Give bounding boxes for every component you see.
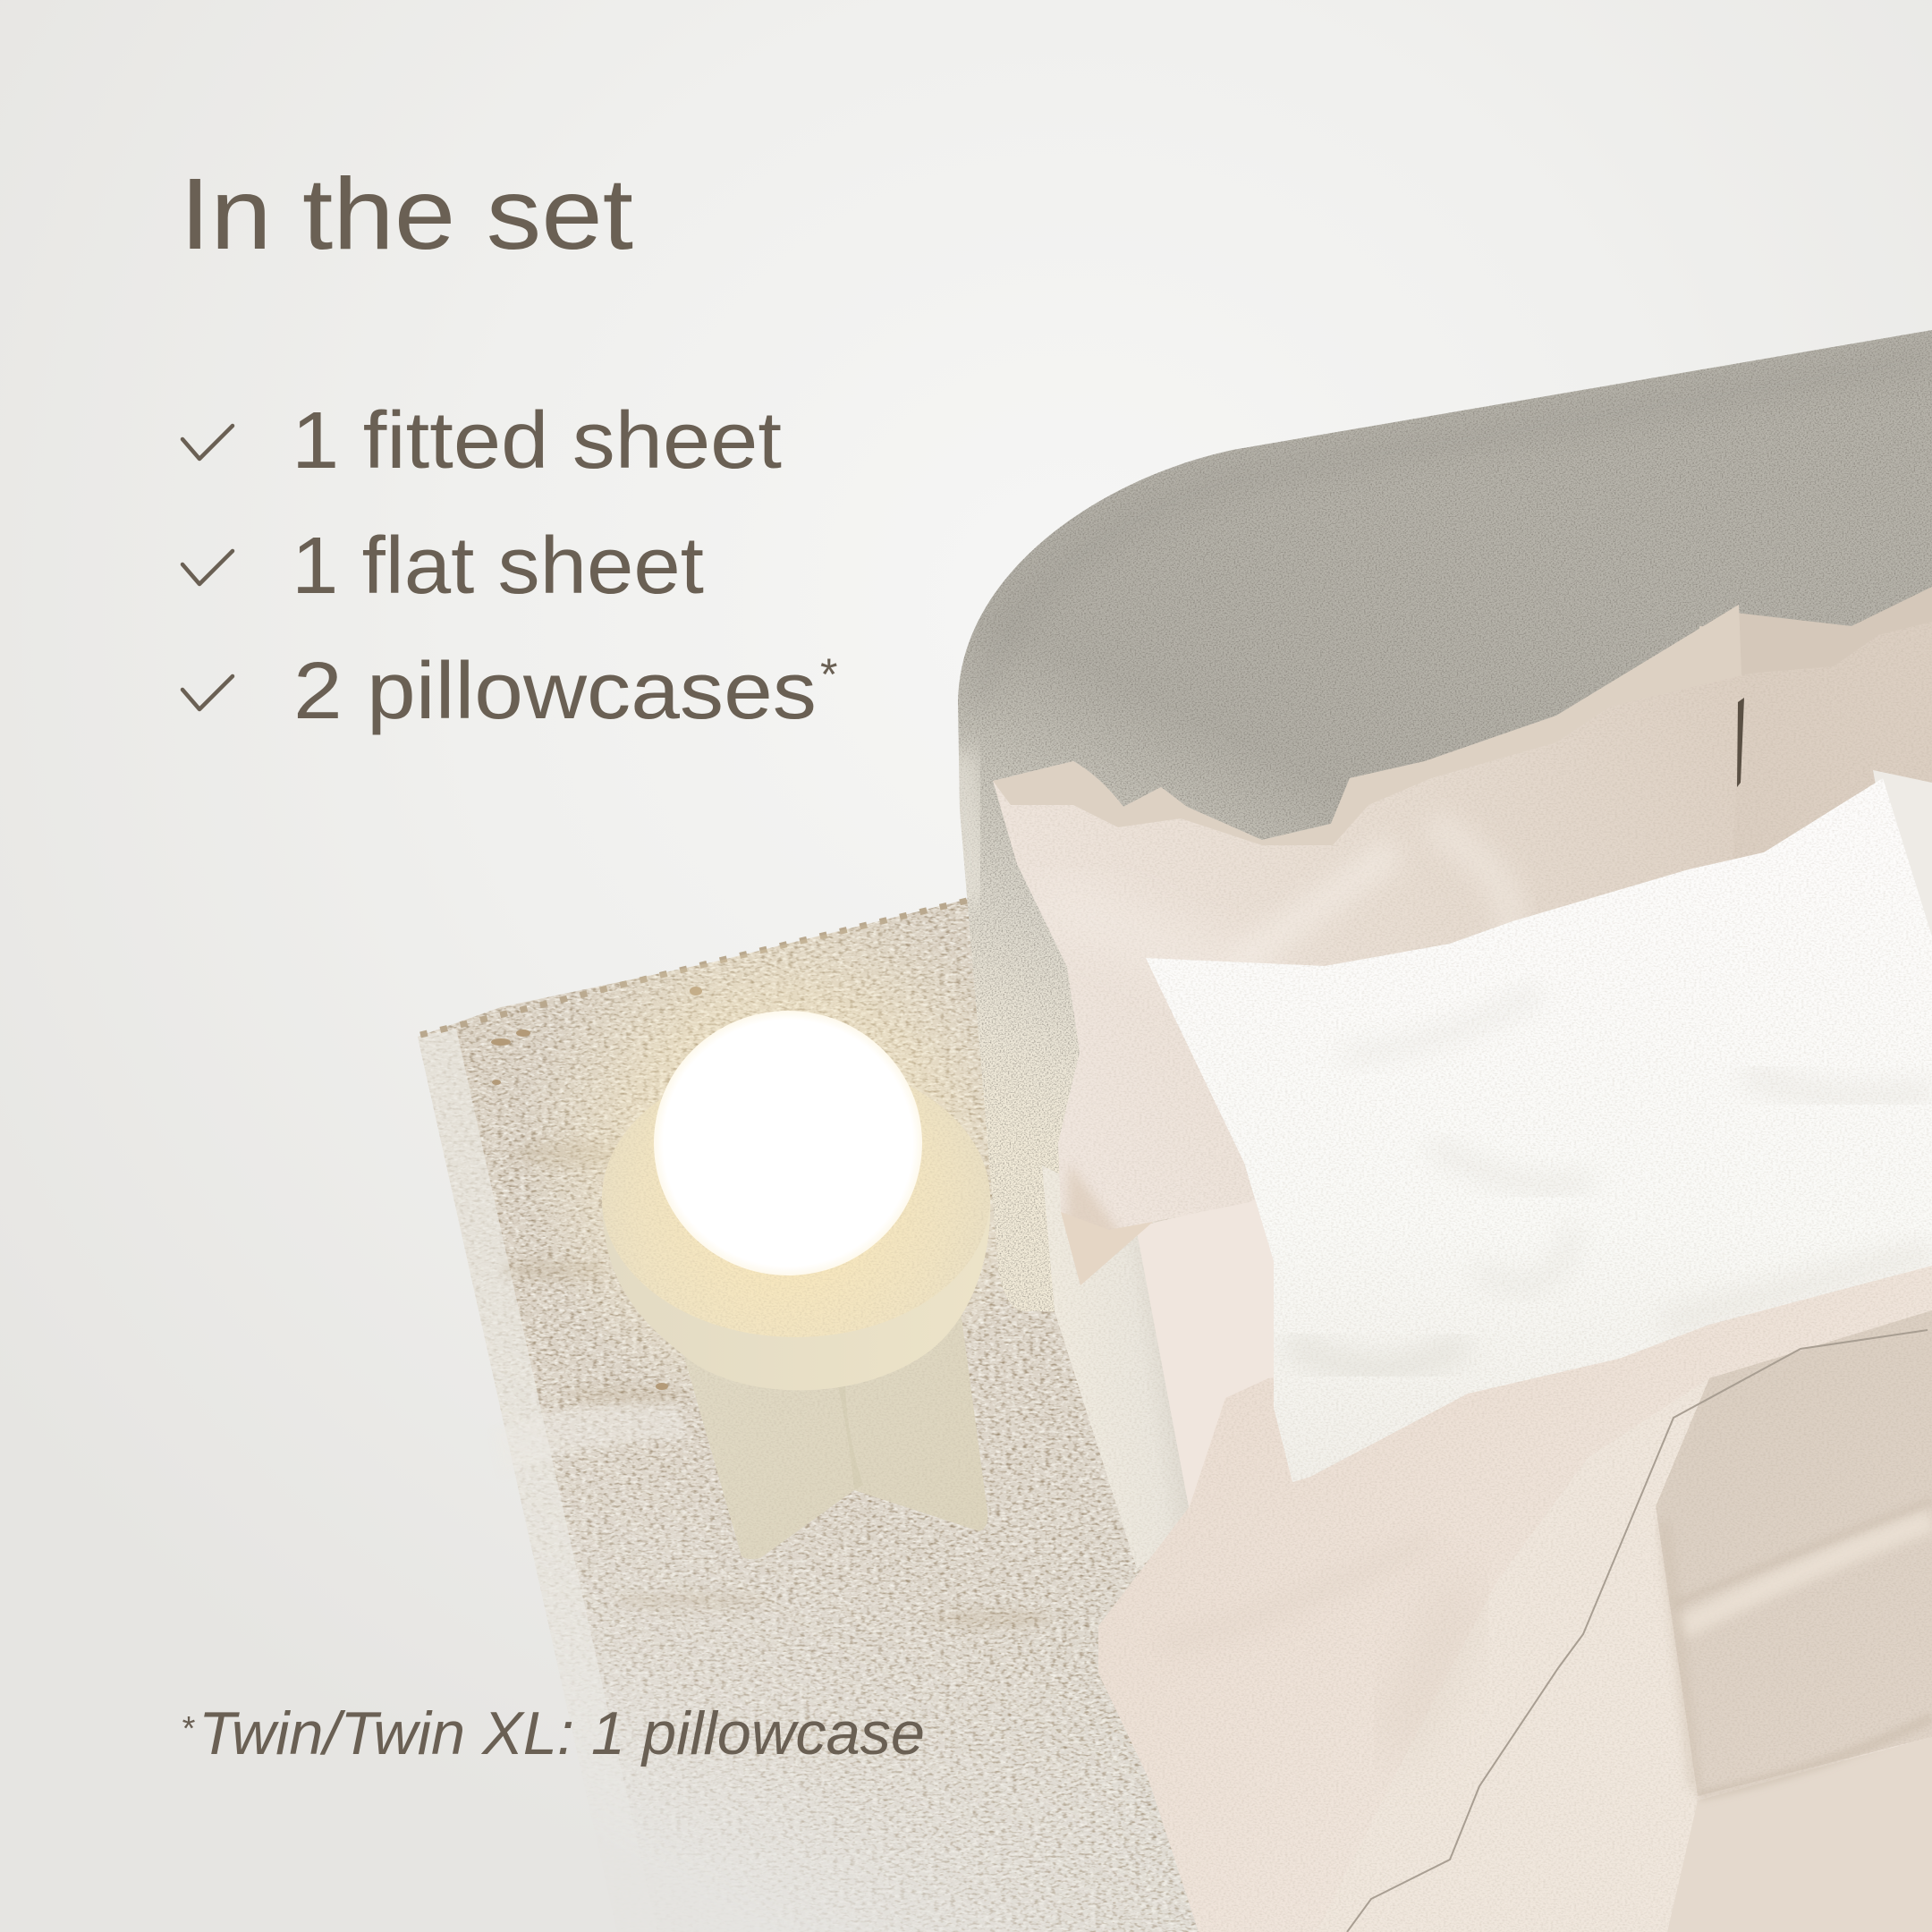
photo: bed, rug and lamp [418, 330, 1932, 1932]
bed side rail [1042, 1165, 1203, 1569]
lamp globe [654, 1011, 922, 1275]
pillow flange [993, 605, 1741, 845]
white pillow rear [1873, 770, 1932, 984]
checklist [182, 396, 837, 736]
pillow gap shadow [1737, 698, 1744, 787]
lamp tabletop [602, 1060, 990, 1337]
back pillow left [993, 605, 1741, 1285]
heading: In the set [180, 157, 633, 270]
sheet hem line [1347, 1330, 1928, 1932]
flat sheet [1098, 1252, 1932, 1932]
lamp glow on rug [556, 932, 996, 1349]
footnote: Twin/Twin XL: 1 pillowcase [199, 1699, 925, 1767]
headboard [958, 330, 1932, 1311]
sheet fold shadow area [1656, 1310, 1932, 1796]
lamp base [682, 1304, 987, 1559]
rug [418, 898, 1199, 1932]
table lamp [602, 1011, 990, 1559]
back pillow right [1699, 587, 1932, 984]
footnote: * [181, 1710, 195, 1748]
item: 1 flat sheet: 1 flat sheet [292, 521, 704, 611]
lamp bowl [602, 1194, 990, 1390]
fitted sheet [1136, 1194, 1395, 1521]
item: 2 pillowcases: * [820, 649, 837, 699]
sheet lower fold [1667, 1737, 1932, 1932]
item: 1 fitted sheet: 1 fitted sheet [292, 396, 782, 486]
item: 2 pillowcases: 2 pillowcases [293, 647, 817, 736]
sheet light band [1656, 1384, 1707, 1506]
white pillow front [1146, 778, 1932, 1482]
